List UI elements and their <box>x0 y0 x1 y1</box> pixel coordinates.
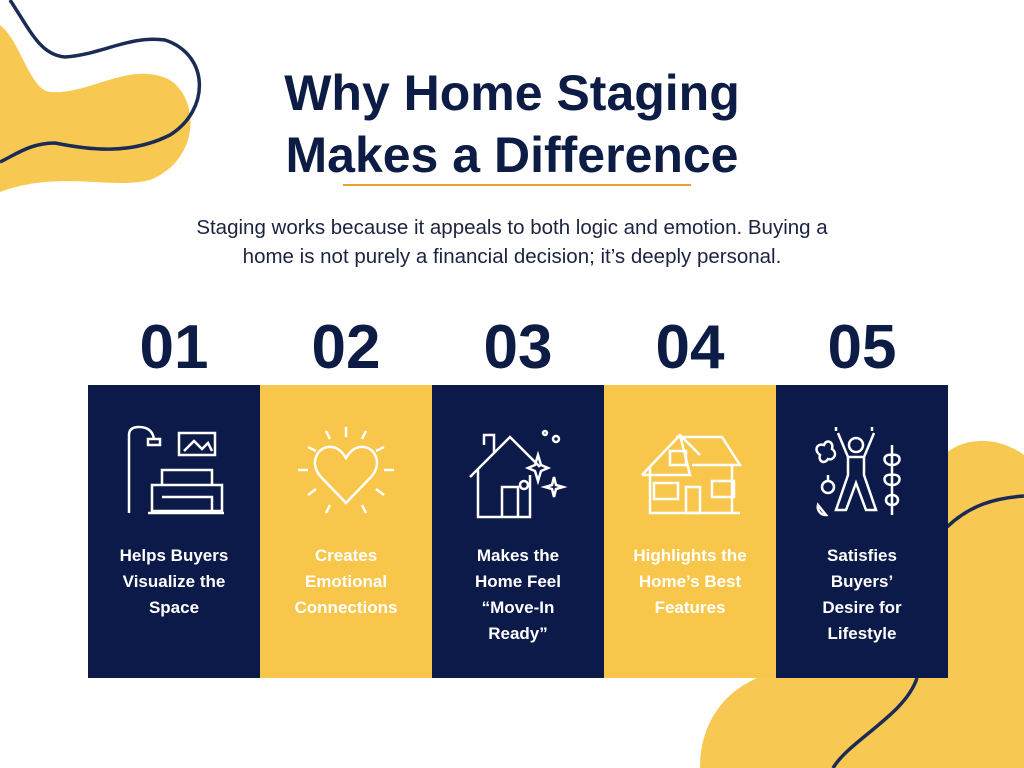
number 01: 01 <box>140 313 208 382</box>
panel 3 <box>432 385 604 678</box>
panel 2 <box>260 385 432 678</box>
label: Connections <box>295 598 397 617</box>
label: Creates <box>315 546 377 565</box>
label: Helps Buyers <box>120 546 228 565</box>
label <box>120 546 228 617</box>
number 03: 03 <box>484 313 552 382</box>
title underline <box>343 184 691 186</box>
label: Makes the <box>477 546 559 565</box>
subtitle <box>196 216 828 268</box>
number 05: 05 <box>828 313 896 382</box>
icon: joyful person with plants <box>815 427 901 516</box>
label <box>822 546 902 643</box>
label <box>475 546 561 643</box>
icon: sofa and lamp <box>128 426 224 514</box>
label: Features <box>655 598 725 617</box>
icon: house <box>641 433 742 514</box>
label <box>295 546 397 617</box>
label: Home’s Best <box>639 572 741 591</box>
label: Ready” <box>488 624 548 643</box>
subtitle: home is not purely a financial decision; it’s deeply personal. <box>243 245 781 268</box>
title: Why Home Staging <box>284 65 740 121</box>
label: Space <box>149 598 199 617</box>
subtitle: Staging works because it appeals to both logic and emotion. Buying a <box>196 216 828 239</box>
label: Visualize the <box>123 572 225 591</box>
number 04: 04 <box>656 313 724 382</box>
label: “Move-In <box>482 598 554 617</box>
title <box>284 65 740 183</box>
label: Home Feel <box>475 572 561 591</box>
panel 5 <box>776 385 948 678</box>
label: Desire for <box>822 598 902 617</box>
icon: sparkling house <box>469 430 568 518</box>
icon: glowing heart <box>298 427 394 514</box>
label <box>633 546 747 617</box>
label: Buyers’ <box>831 572 893 591</box>
title: Makes a Difference <box>285 127 738 183</box>
label: Satisfies <box>827 546 897 565</box>
label: Highlights the <box>633 546 747 565</box>
panel 4 <box>604 385 776 678</box>
panel 1 <box>88 385 260 678</box>
number 02: 02 <box>312 313 380 382</box>
label: Lifestyle <box>828 624 896 643</box>
label: Emotional <box>305 572 387 591</box>
